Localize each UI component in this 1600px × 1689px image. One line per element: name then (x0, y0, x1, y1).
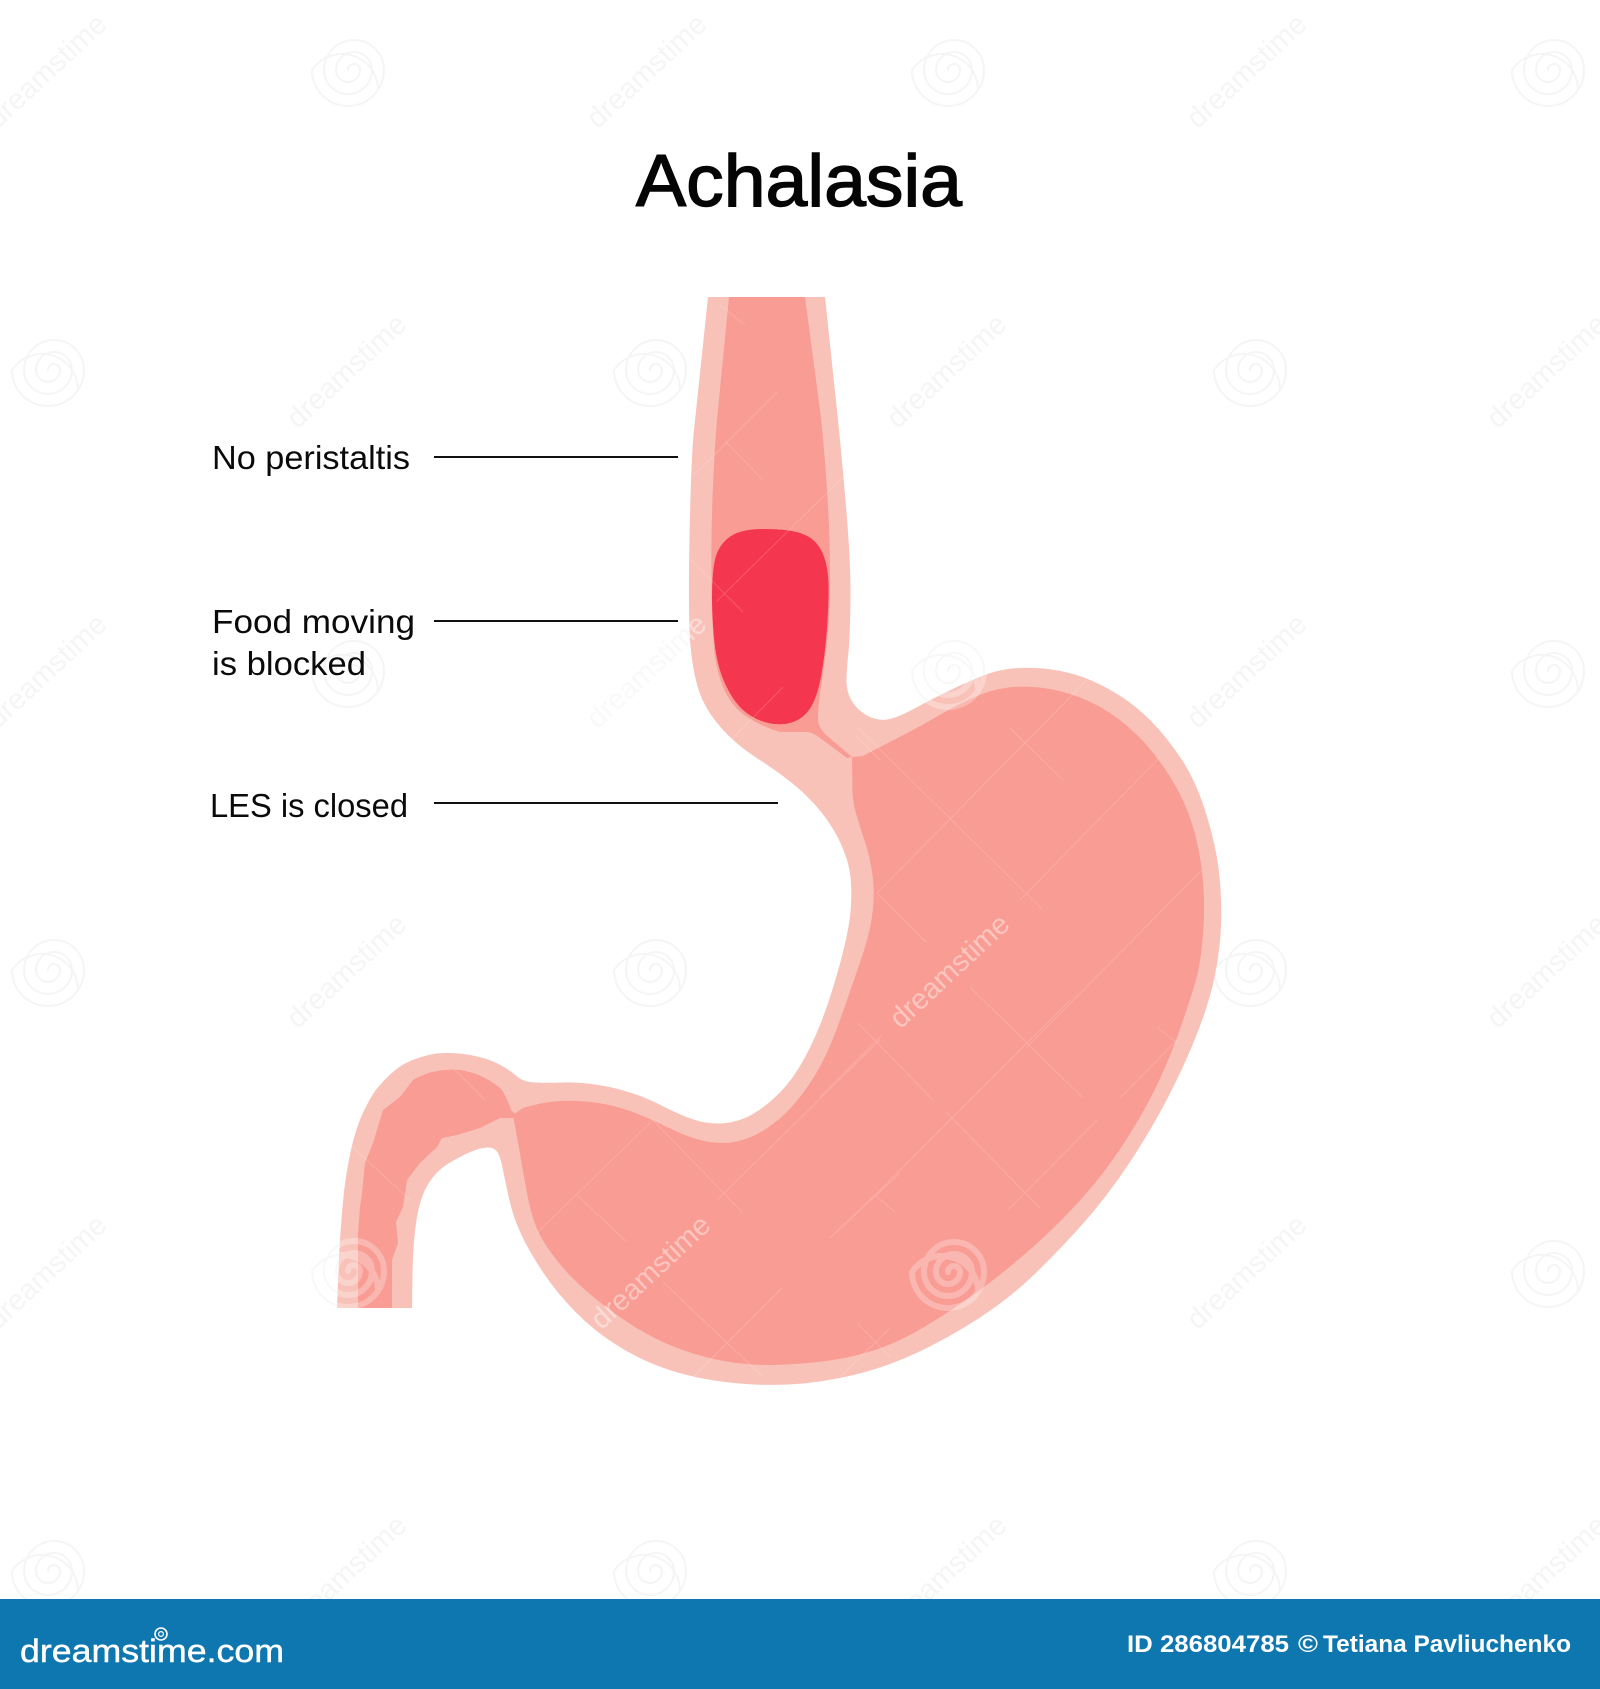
footer credit: Tetiana Pavliuchenko (1323, 1631, 1571, 1658)
text: dreamstime (884, 908, 1016, 1035)
label: LES is closed: LES is closed (210, 787, 408, 824)
footer credit (1127, 1631, 1571, 1658)
stomach lumen (513, 687, 1204, 1365)
text: dreamstime (1181, 608, 1313, 735)
footer credit: © (1298, 1631, 1318, 1658)
text: dreamstime (581, 8, 713, 135)
text: dreamstime (581, 608, 713, 735)
text: dreamstime (281, 308, 413, 435)
text: dreamstime (881, 308, 1013, 435)
text: dreamstime (581, 608, 713, 735)
duodenum lumen (358, 1070, 517, 1308)
food bolus (712, 529, 829, 724)
title: Achalasia (636, 141, 962, 222)
label: Food moving is blocked: Food moving (212, 603, 415, 640)
text: dreamstime (281, 1509, 413, 1636)
footer bar (0, 1599, 1600, 1689)
text: dreamstime (881, 1509, 1013, 1636)
esophagus lumen (711, 297, 852, 758)
footer logo: dreamstime.com (20, 1633, 284, 1669)
outer wall (337, 297, 1221, 1385)
text: dreamstime (1181, 1209, 1313, 1336)
label: No peristaltis: No peristaltis (212, 439, 410, 476)
stomach and esophagus illustration (337, 297, 1221, 1385)
text: dreamstime (585, 1209, 717, 1336)
text: dreamstime (281, 908, 413, 1035)
text: dreamstime (1181, 8, 1313, 135)
label: Food moving is blocked: is blocked (212, 645, 366, 682)
label: Food moving is blocked (212, 603, 678, 682)
footer credit: ID 286804785 (1127, 1631, 1289, 1658)
